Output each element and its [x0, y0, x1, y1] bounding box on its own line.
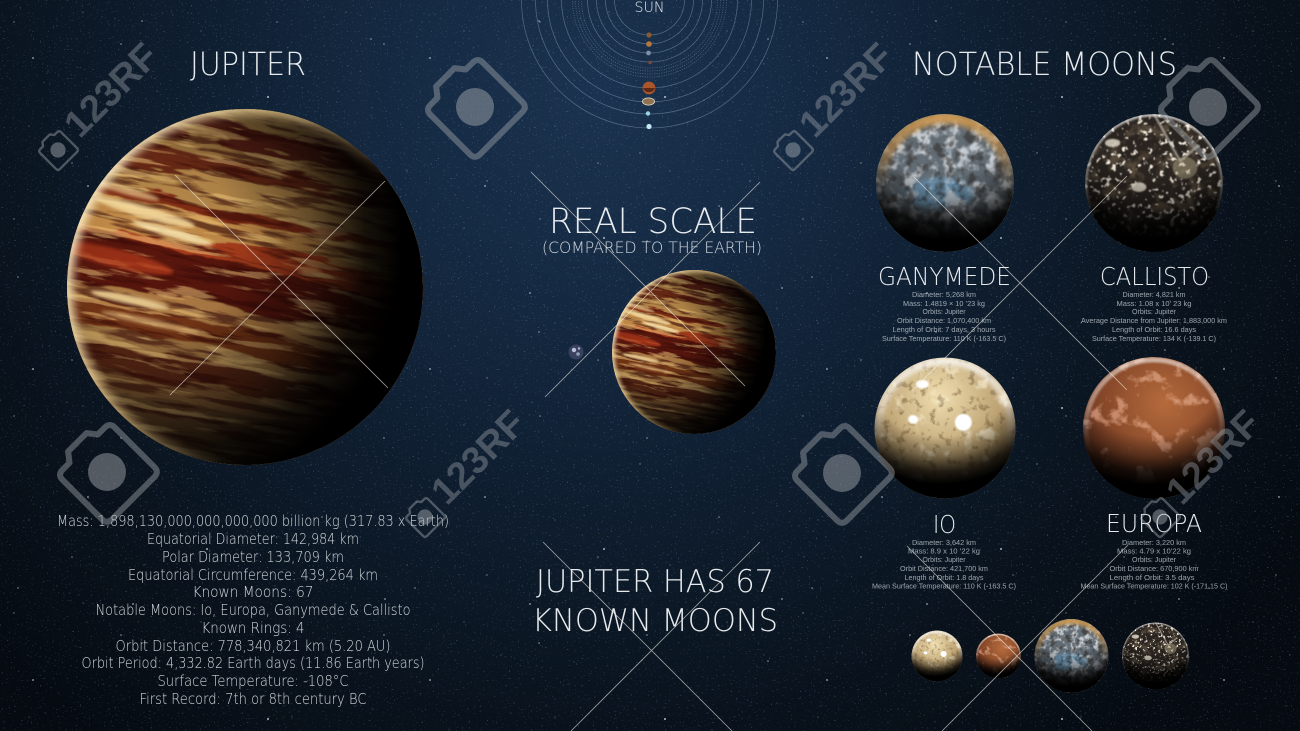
Callisto label and facts: Average Distance from Jupiter: 1,883,000 km — [1081, 316, 1227, 325]
Callisto label and facts: Length of Orbit: 16.6 days — [1112, 325, 1196, 334]
Jupiter statistics text block — [57, 512, 449, 708]
Ganymede label and facts: Length of Orbit: 7 days, 3 hours — [892, 325, 996, 334]
moon: Io — [874, 358, 1016, 498]
Io label and facts: Diameter: 3,642 km — [912, 538, 976, 547]
heading: known moons: KNOWN MOONS — [532, 603, 778, 639]
Callisto label and facts: Surface Temperature: 134 K (-139.1 C) — [1092, 334, 1216, 343]
heading: real scale: REAL SCALE — [549, 202, 757, 242]
Jupiter statistics text block: Known Moons: 67 — [192, 583, 314, 601]
Ganymede label and facts — [878, 262, 1011, 343]
Ganymede label and facts: Orbit Distance: 1,070,400 km — [897, 316, 991, 325]
Io label and facts: Orbit Distance: 421,700 km — [900, 564, 988, 573]
planet: Earth at scale — [568, 344, 584, 360]
Io label and facts: Orbits: Jupiter — [922, 555, 966, 564]
Europa label and facts: Diameter: 3,220 km — [1122, 538, 1186, 547]
Callisto label and facts: Orbits: Jupiter — [1132, 307, 1176, 316]
Jupiter statistics text block: Mass: 1,898,130,000,000,000,000 billion kg (317.83 x Earth) — [57, 512, 449, 530]
label: sun: SUN — [634, 0, 664, 16]
watermark: 123RF text — [57, 36, 1269, 513]
Europa label and facts: Mean Surface Temperature: 102 K (-171.15 C) — [1080, 582, 1228, 590]
Io label and facts: Mass: 8.9 x 10 ’22 kg — [908, 546, 980, 556]
moon: Europa — [1083, 357, 1225, 499]
Callisto label and facts: Mass: 1.08 x 10’ 23 kg — [1116, 299, 1192, 308]
heading: known moons: JUPITER HAS 67 — [536, 564, 774, 600]
planet: Jupiter at scale — [578, 235, 810, 467]
heading: Jupiter: JUPITER — [190, 45, 306, 83]
Io label and facts: Mean Surface Temperature: 110 K (-163.5 C) — [872, 582, 1016, 590]
Jupiter statistics text block: Polar Diameter: 133,709 km — [162, 548, 344, 566]
Callisto label and facts: Diameter: 4,821 km — [1122, 290, 1186, 299]
Ganymede label and facts: Surface Temperature: 110 K (-163.5 C) — [882, 334, 1006, 343]
Jupiter statistics text block: Equatorial Circumference: 439,264 km — [128, 566, 378, 584]
Io label and facts: Length of Orbit: 1.8 days — [904, 573, 984, 582]
moon: Callisto — [1085, 114, 1223, 252]
heading: real scale: (COMPARED TO THE EARTH) — [542, 238, 762, 257]
watermark: 123RF text: 123RF — [792, 36, 902, 146]
Ganymede label and facts: Orbits: Jupiter — [922, 307, 966, 316]
solar system diagram — [522, 0, 778, 129]
Io label and facts — [872, 510, 1016, 590]
watermark cross lines — [170, 172, 1128, 731]
Callisto label and facts: CALLISTO — [1100, 262, 1209, 291]
Europa label and facts: Mass: 4.79 x 10’22 kg — [1117, 546, 1191, 556]
watermark: 123RF text: 123RF — [424, 403, 534, 513]
Ganymede label and facts: GANYMEDE — [878, 262, 1011, 291]
Ganymede label and facts: Mass: 1.4819 × 10 ’23 kg — [903, 299, 985, 308]
watermark: stock logos — [36, 51, 1260, 538]
Ganymede label and facts: Diameter: 5,268 km — [912, 290, 976, 299]
Jupiter statistics text block: Known Rings: 4 — [202, 619, 304, 637]
Io label and facts: IO — [933, 510, 956, 539]
Europa label and facts: EUROPA — [1106, 509, 1202, 538]
heading: notable moons: NOTABLE MOONS — [912, 45, 1177, 83]
Jupiter statistics text block: Equatorial Diameter: 142,984 km — [147, 530, 359, 548]
heading: known moons — [532, 564, 778, 639]
Callisto label and facts — [1081, 262, 1227, 343]
small moons size comparison row — [912, 619, 1189, 693]
Europa label and facts: Orbits: Jupiter — [1132, 555, 1176, 564]
Jupiter statistics text block: First Record: 7th or 8th century BC — [140, 690, 366, 708]
watermark: 123RF text: 123RF — [57, 36, 167, 146]
moon: Ganymede — [876, 114, 1014, 252]
watermark: 123RF text: 123RF — [1159, 403, 1269, 513]
solar system planets — [642, 32, 655, 129]
Jupiter statistics text block: Orbit Period: 4,332.82 Earth days (11.86 Earth years) — [82, 654, 424, 672]
Jupiter statistics text block: Orbit Distance: 778,340,821 km (5.20 AU) — [116, 637, 390, 655]
Europa label and facts: Orbit Distance: 670,900 km — [1110, 564, 1198, 573]
Europa label and facts — [1080, 509, 1228, 590]
Jupiter statistics text block: Notable Moons: Io, Europa, Ganymede & Callisto — [96, 601, 410, 619]
Europa label and facts: Length of Orbit: 3.5 days — [1110, 573, 1195, 582]
Jupiter statistics text block: Surface Temperature: -108°C — [158, 672, 348, 690]
planet: large Jupiter — [0, 33, 497, 537]
